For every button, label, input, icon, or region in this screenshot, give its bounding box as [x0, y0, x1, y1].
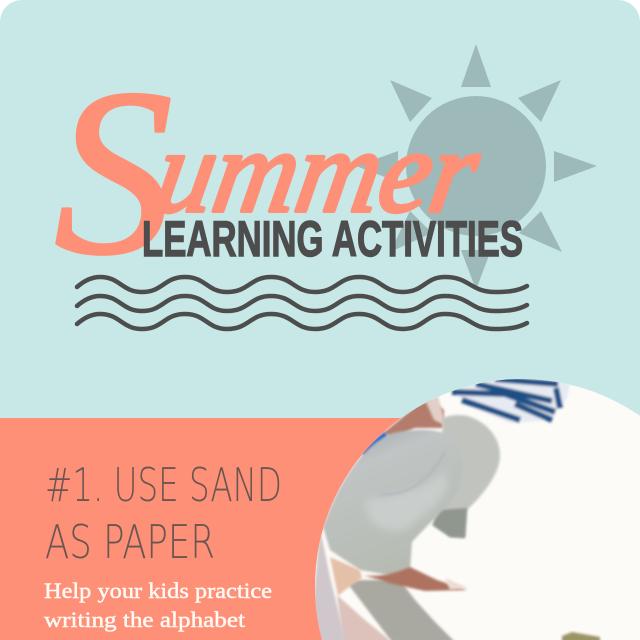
rear leg: [433, 414, 502, 539]
photo: child crouching on beach: [300, 370, 640, 640]
thigh highlight: [367, 476, 446, 532]
arm: [383, 400, 444, 438]
heading: Use Sand as Paper: AS PAPER: [45, 515, 215, 569]
shirt with navy stripes: [445, 376, 572, 423]
thigh: [323, 428, 444, 575]
letters in sand: [562, 632, 600, 640]
title: Summer: S: [54, 41, 173, 304]
front foot: [337, 595, 392, 640]
title: Summer: ummer: [147, 106, 489, 237]
text block: activity description: writing the alphabet: [44, 607, 245, 632]
panel: header background: [0, 0, 640, 450]
rear foot: [363, 567, 467, 591]
icon: waves: [77, 277, 527, 329]
blurred foreground edge: [315, 533, 346, 640]
shadow on sand: [345, 580, 455, 640]
icon: sun: [356, 44, 597, 290]
heading: Use Sand as Paper: [46, 466, 280, 558]
pocket line: [380, 452, 445, 495]
lower leg: [330, 557, 362, 596]
title: Summer: [55, 92, 482, 256]
text block: activity description: [44, 578, 272, 632]
text block: activity description: Help your kids practice: [44, 578, 272, 603]
shadow under knee: [432, 508, 467, 538]
panel: activity section background: [0, 418, 402, 640]
heading: Use Sand as Paper: #1. USE SAND: [45, 458, 282, 512]
